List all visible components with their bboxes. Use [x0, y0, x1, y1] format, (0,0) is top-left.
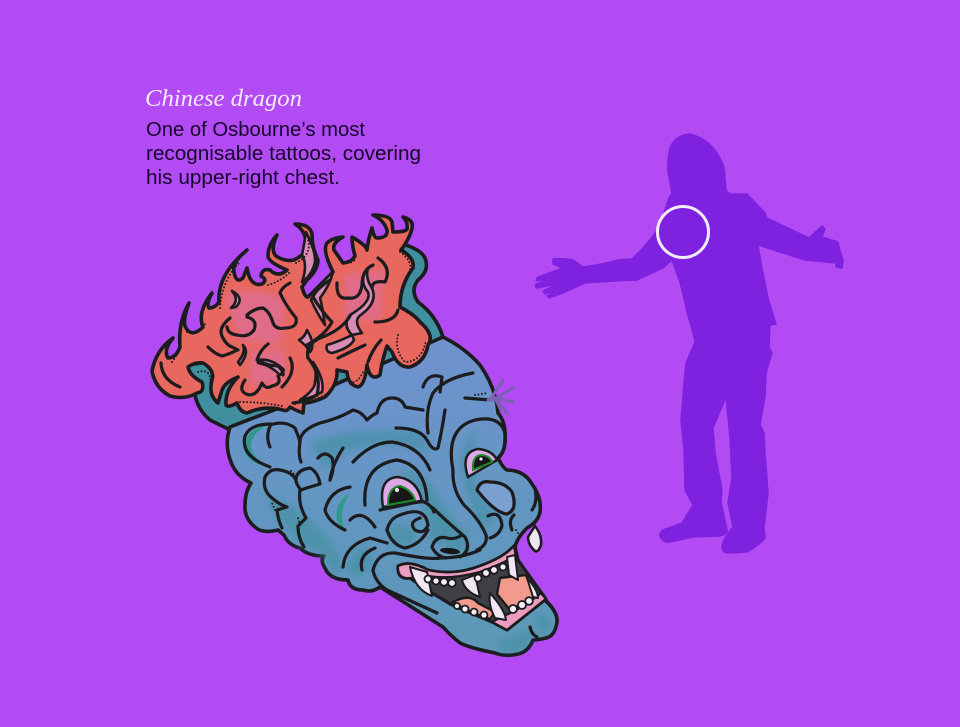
flames — [152, 215, 430, 413]
jaw line — [530, 627, 537, 637]
mouth — [398, 546, 546, 630]
lower fangs — [490, 593, 506, 620]
forehead and cheek lines — [244, 373, 490, 613]
tongue — [453, 598, 495, 619]
soft teal shading — [265, 428, 552, 652]
flame highlights — [225, 270, 385, 385]
upper fangs — [410, 567, 432, 596]
skin stippling — [272, 393, 520, 610]
teal band behind flames — [185, 243, 460, 430]
teal crescents — [244, 424, 271, 466]
dragon head illustration — [152, 215, 557, 655]
body silhouette — [536, 134, 843, 553]
right eye — [451, 419, 505, 477]
heading: Chinese dragon: Chinese dragon — [145, 86, 302, 112]
small teeth — [424, 564, 533, 618]
description text: recognisable tattoos, covering — [146, 143, 421, 165]
description text — [146, 119, 421, 189]
description text: One of Osbourne’s most — [146, 119, 365, 141]
upper gum — [398, 546, 516, 578]
snout, nose and spiral — [387, 470, 536, 558]
flame shape — [152, 215, 430, 413]
lower gum — [492, 593, 546, 630]
left eye — [365, 460, 434, 512]
nostril — [440, 547, 460, 555]
description text: his upper-right chest. — [146, 167, 340, 189]
flame inner lines — [161, 258, 398, 403]
right tusk — [528, 526, 541, 551]
pink streaks — [231, 232, 374, 400]
head base shape — [227, 337, 557, 655]
purple star tuft — [488, 380, 513, 413]
location ring marker — [658, 206, 708, 258]
flame stippling — [172, 240, 426, 406]
mouth cavity — [398, 546, 546, 630]
